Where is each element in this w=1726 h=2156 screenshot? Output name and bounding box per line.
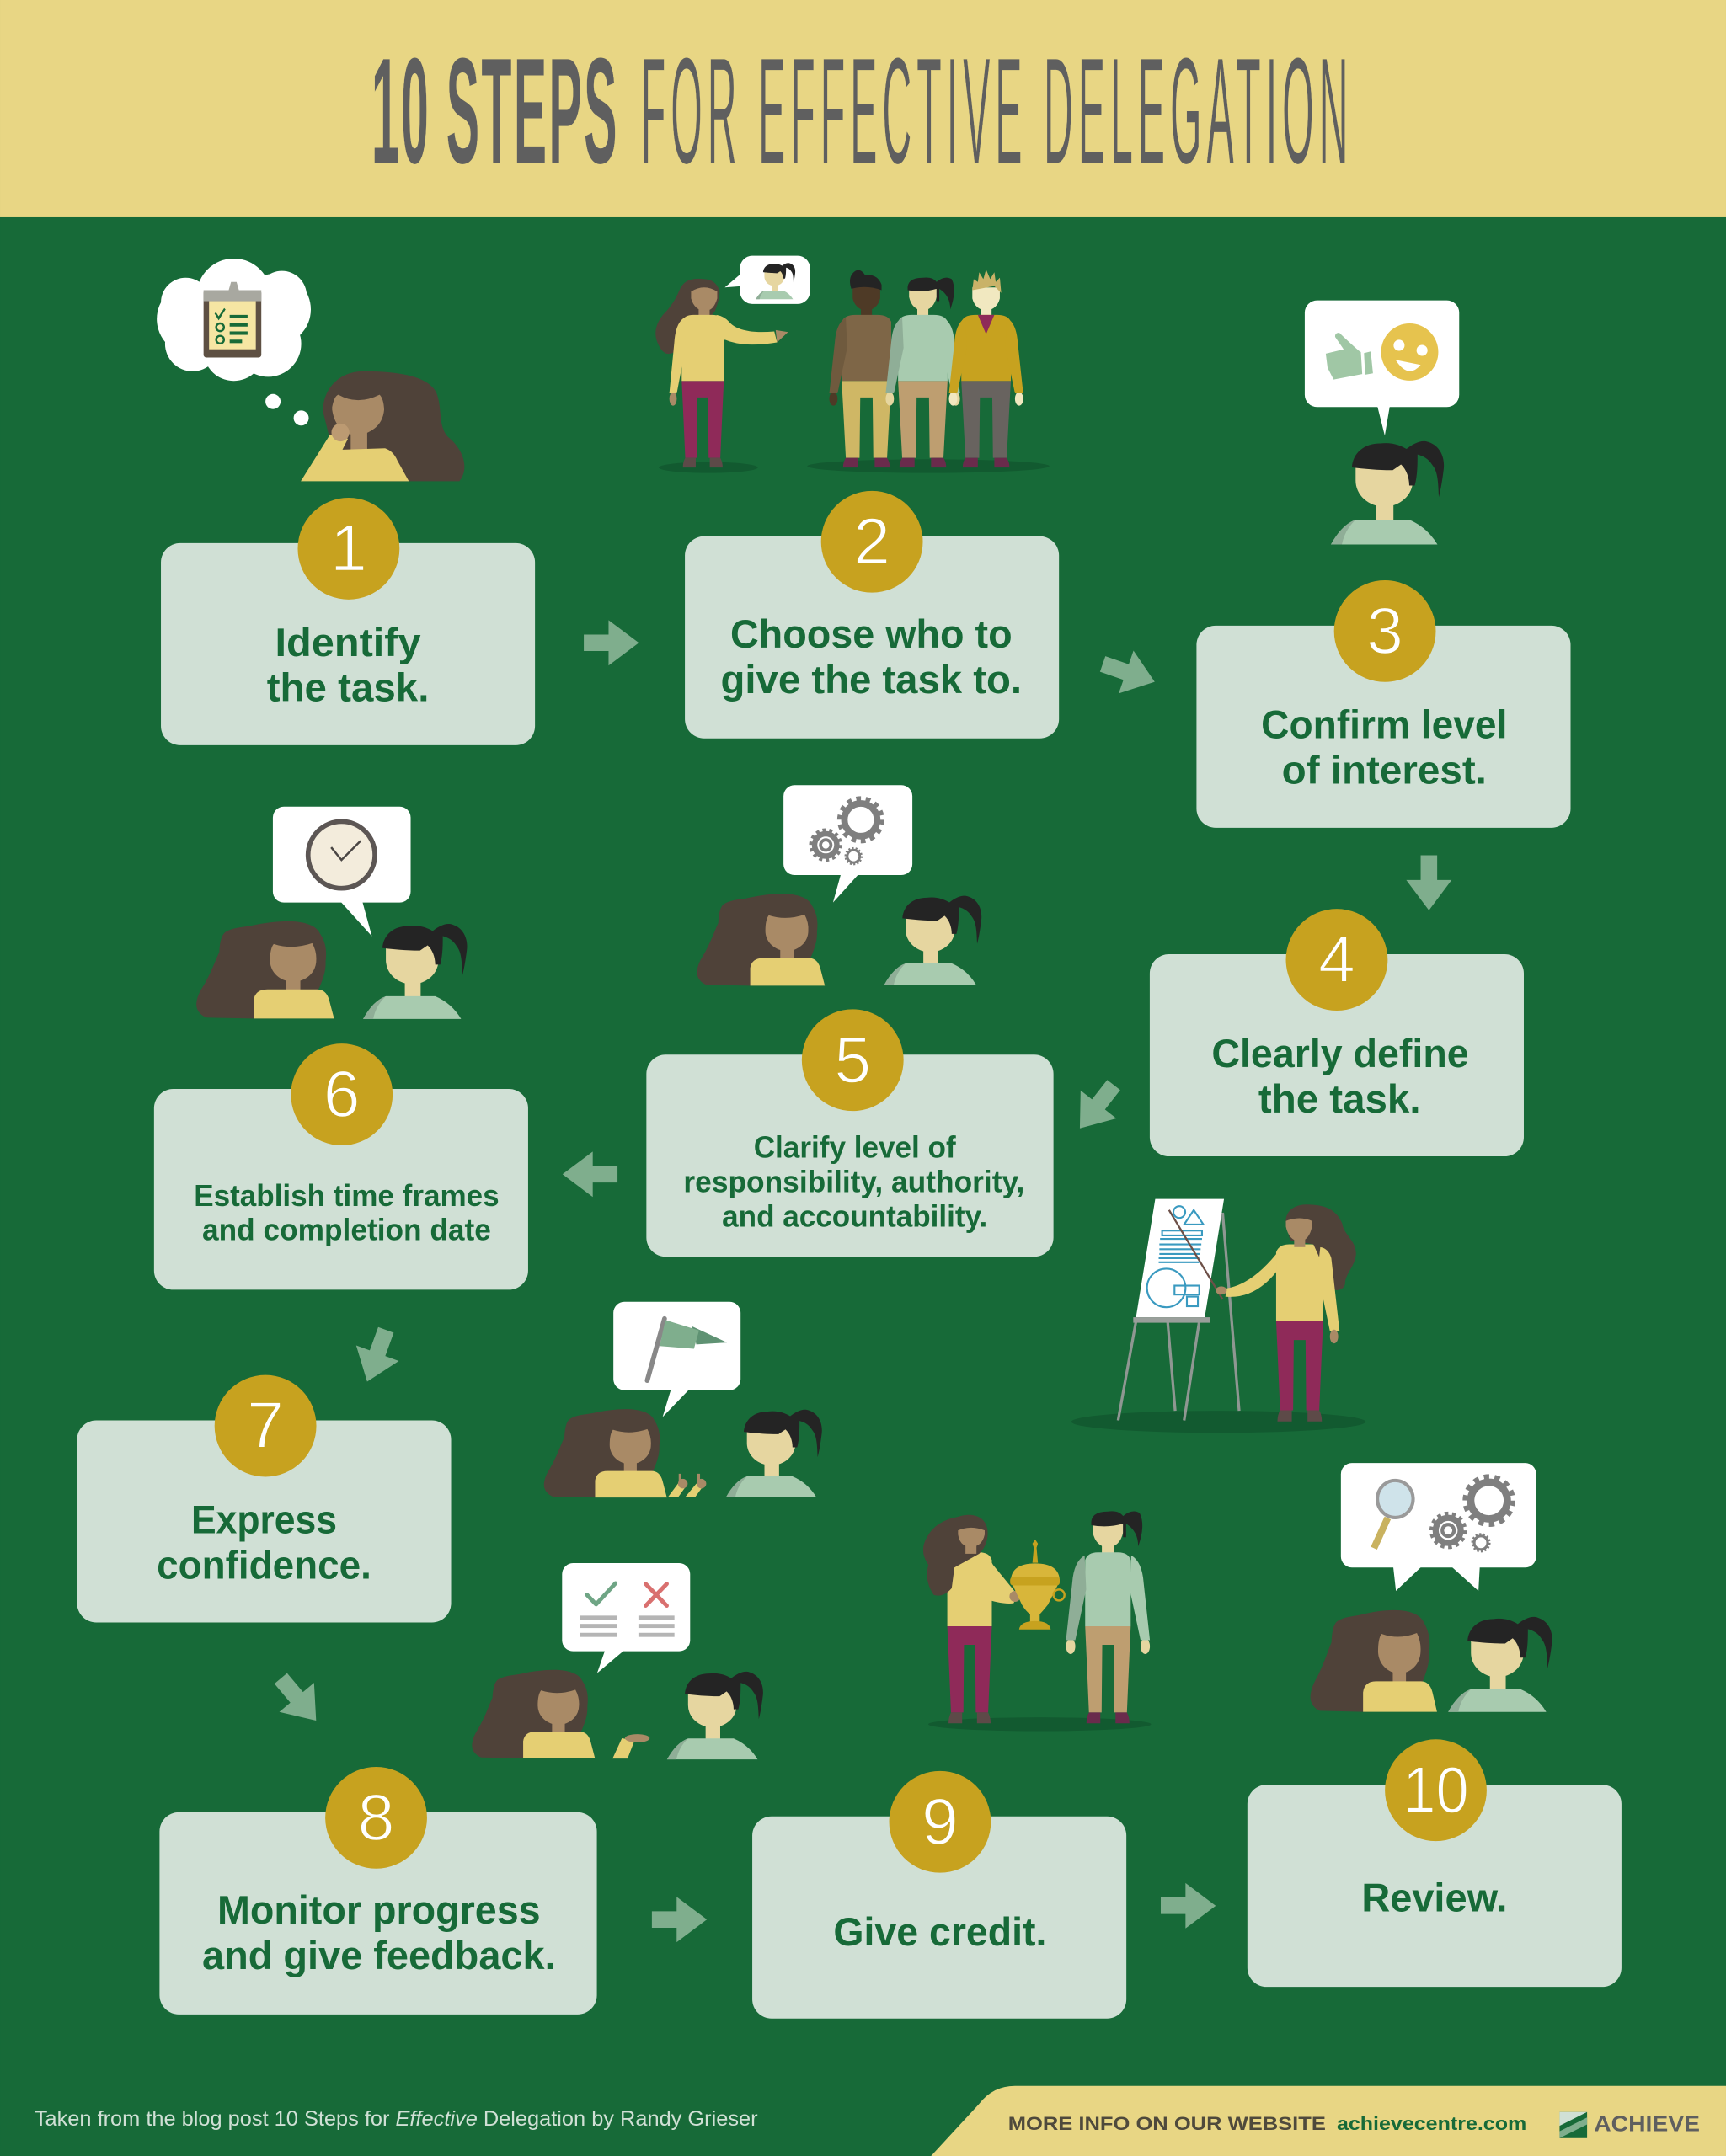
panel: step 3: of interest. [1282, 749, 1487, 793]
team member blond [949, 270, 1023, 467]
team member dark [829, 270, 891, 467]
woman head and arm [923, 1515, 1020, 1604]
footer tab [931, 2086, 1726, 2156]
icon: smiley [1381, 323, 1438, 381]
panel: step 5 [646, 1009, 1054, 1257]
panel: step 5: and accountability. [722, 1198, 987, 1233]
logo [1559, 2111, 1700, 2138]
illustration: step 10 review conversation [1311, 1463, 1552, 1712]
panel: step 1 [161, 498, 535, 745]
shadows [659, 459, 1050, 473]
team member ponytail [885, 277, 960, 467]
speech bubble [1305, 301, 1459, 435]
logo: ACHIEVE [1594, 2111, 1700, 2137]
speech bubble with person [724, 256, 810, 304]
website text: MORE INFO ON OUR WEBSITE [1008, 2113, 1326, 2134]
panel: step 2: give the task to. [721, 658, 1022, 702]
source credit: Taken from the blog post 10 Steps for Effective Delegation by Randy Grieser [35, 2107, 758, 2131]
panel: step 6: 6 [323, 1057, 361, 1131]
panel: step 4: 4 [1318, 922, 1355, 996]
trophy [1010, 1540, 1065, 1630]
arrow: step 9 to 10 [1161, 1883, 1216, 1929]
panel: step 7: 7 [247, 1388, 284, 1462]
speech bubble with magnifier and gears [1341, 1463, 1536, 1591]
panel: step 3: Confirm level [1261, 703, 1507, 748]
panel: step 10: 10 [1403, 1753, 1469, 1827]
panel: step 10 [1248, 1739, 1622, 1987]
panel: step 8: Monitor progress [217, 1888, 541, 1933]
ponytail person [884, 896, 981, 985]
ponytail person [1331, 441, 1444, 545]
header band [0, 0, 1726, 217]
panel: step 8: and give feedback. [202, 1934, 556, 1978]
panel: step 2 [685, 491, 1059, 739]
shadow [1071, 1411, 1365, 1433]
title: 10 STEPS [371, 26, 619, 195]
woman [196, 921, 334, 1018]
arrow: step 5 to 6 [563, 1151, 617, 1197]
panel: step 5: Clarify level of [754, 1130, 957, 1165]
woman giving [948, 1552, 991, 1723]
panel: step 9: 9 [922, 1784, 959, 1858]
arrow: step 4 to 5 [1062, 1071, 1131, 1142]
woman [472, 1670, 595, 1758]
panel: step 5: responsibility, authority, [683, 1165, 1024, 1199]
illustration: step 3 thumbs up bubble [1305, 301, 1459, 545]
speech bubble with gears [783, 785, 912, 903]
ponytail person [1448, 1617, 1552, 1712]
panel: step 4 [1150, 909, 1524, 1156]
woman [544, 1409, 667, 1497]
woman thinking [301, 371, 464, 481]
illustration: step 6 clock conversation [196, 807, 467, 1019]
open hand [612, 1734, 649, 1758]
illustration: step 9 trophy handover [923, 1511, 1152, 1732]
arrow: step 8 to 9 [652, 1897, 707, 1942]
illustration: step 7 flag conversation [544, 1302, 822, 1497]
woman presenting [1276, 1245, 1323, 1422]
illustration: step 4 woman at flipchart [1071, 1199, 1365, 1433]
panel: step 2: 2 [853, 504, 890, 578]
thought cloud with clipboard [157, 259, 311, 425]
panel: step 8 [159, 1767, 597, 2015]
panel: step 6: Establish time frames [194, 1178, 500, 1213]
gesturing hands [668, 1474, 706, 1497]
panel: step 7 [77, 1375, 452, 1623]
speech bubble with check and cross [562, 1563, 690, 1673]
panel: step 7: confidence. [157, 1543, 371, 1588]
shadow [928, 1717, 1152, 1732]
panel: step 7: Express [191, 1497, 337, 1542]
panel: step 1: Identify [275, 621, 421, 665]
panel: step 6: and completion date [202, 1213, 491, 1247]
arrow: step 2 to 3 [1095, 643, 1162, 703]
panel: step 1: 1 [330, 511, 367, 585]
arrow: step 7 to 8 [264, 1664, 334, 1735]
arrow: step 1 to 2 [584, 620, 639, 665]
illustration: step 1 thinking woman [157, 259, 464, 481]
ponytail person [363, 924, 467, 1019]
icon: thumbs up [1326, 333, 1373, 380]
website text: achievecentre.com [1337, 2113, 1526, 2134]
speech bubble with flag [613, 1302, 740, 1417]
panel: step 2: Choose who to [730, 612, 1013, 657]
woman [697, 894, 825, 985]
panel: step 9 [752, 1771, 1126, 2019]
panel: step 4: Clearly define [1211, 1032, 1469, 1076]
panel: step 3: 3 [1366, 594, 1403, 668]
panel: step 1: the task. [267, 666, 429, 711]
easel and flipchart [1118, 1199, 1239, 1421]
panel: step 5: 5 [834, 1022, 871, 1097]
panel: step 10: Review. [1361, 1876, 1507, 1920]
arrow: step 3 to 4 [1406, 856, 1451, 910]
illustration: step 5 gears conversation [697, 785, 981, 985]
ponytail person receiving [1066, 1511, 1150, 1723]
woman [1311, 1610, 1437, 1712]
illustration: step 8 feedback conversation [472, 1563, 763, 1759]
illustration: step 2 woman pointing at team [655, 256, 1050, 473]
panel: step 3 [1196, 580, 1570, 828]
panel: step 4: the task. [1258, 1077, 1421, 1122]
speech bubble with clock [273, 807, 411, 937]
panel: step 9: Give credit. [833, 1910, 1046, 1955]
ponytail person [726, 1410, 822, 1497]
hair and head [1216, 1204, 1356, 1343]
panel: step 6 [154, 1043, 528, 1289]
ponytail person [667, 1672, 763, 1759]
woman pointing [655, 279, 788, 467]
arrow: step 6 to 7 [346, 1322, 408, 1390]
panel: step 8: 8 [358, 1780, 394, 1854]
